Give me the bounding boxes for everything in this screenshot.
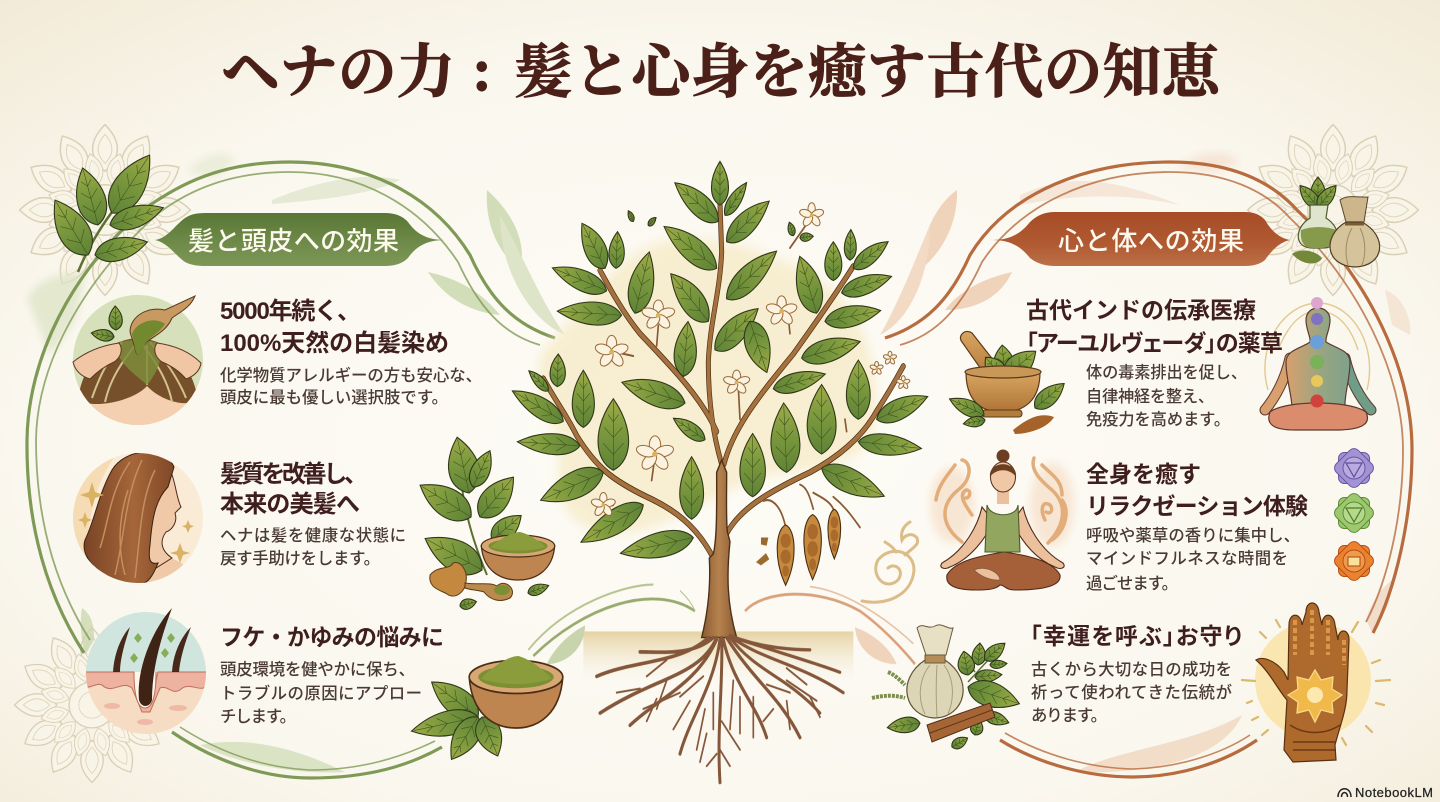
- right item 1 text: 免疫力を高めます。: [1086, 410, 1230, 429]
- title: ヘナの力: [221, 40, 455, 105]
- icon: chakra heart green: [1332, 491, 1376, 535]
- right item 2 text: マインドフルネスな時間を: [1086, 550, 1288, 568]
- right item 1 text: 体の毒素排出を促し、: [1086, 364, 1247, 382]
- flowers: [590, 203, 910, 517]
- right heading pill: [992, 212, 1290, 266]
- right item 3 text: あります。: [1031, 707, 1107, 725]
- right heading pill: 心と体への効果: [1058, 226, 1244, 256]
- right item 1 text: 自律神経を整え、: [1086, 388, 1214, 406]
- left item 3 text: 頭皮環境を健やかに保ち、: [220, 661, 415, 679]
- icon: woman in yoga pose with steam swirls: [930, 450, 1074, 590]
- ornamental swirl: [862, 522, 918, 602]
- left heading pill: [155, 213, 445, 266]
- decorative mandala: top right: [1248, 125, 1418, 295]
- title: 髪と心身を癒す古代の知恵: [514, 40, 1224, 105]
- left heading pill: 髪と頭皮への効果: [188, 226, 399, 256]
- seed pods: [756, 509, 841, 585]
- right item 1 text: 古代インドの伝承医療: [1026, 297, 1256, 323]
- icon: green powder bowl with leaves: [409, 656, 563, 766]
- soft wash behind tree: [538, 239, 877, 534]
- left item 2 text: 髪質を改善し、: [220, 461, 368, 488]
- right item 2 text: 全身を癒す: [1086, 461, 1201, 487]
- left item 1 text: 化学物質アレルギーの方も安心な、: [220, 367, 482, 385]
- right item 3 text: [1030, 623, 1242, 725]
- right item 1 text: [1026, 297, 1283, 429]
- trunk: [702, 460, 737, 638]
- left frame arc: [27, 162, 555, 778]
- left item 1 text: 頭皮に最も優しい選択肢です。: [220, 389, 448, 407]
- decorative mandala: bottom left: [15, 628, 169, 782]
- left item 2 text: 本来の美髪へ: [220, 491, 360, 518]
- roots: [597, 636, 843, 782]
- central henna tree: [509, 161, 931, 782]
- title: [221, 37, 1224, 105]
- left item 3 text: フケ・かゆみの悩みに: [220, 624, 444, 650]
- icon: top-left leaf sprig: [42, 147, 167, 272]
- icon: woman with healthy hair: [73, 453, 203, 583]
- swooshes: [528, 585, 915, 664]
- icon: chakra sacral orange: [1332, 539, 1376, 583]
- icon: mortar and pestle: [946, 331, 1070, 434]
- left item 2 text: [220, 461, 406, 568]
- icon: chakra crown purple: [1332, 446, 1376, 490]
- left item 2 text: 戻す手助けをします。: [220, 550, 380, 568]
- decorative mandala: top left: [20, 125, 190, 295]
- brand mark: NotebookLM: [1355, 785, 1433, 800]
- right item 2 text: リラクゼーション体験: [1086, 493, 1308, 519]
- right item 3 text: 祈って使われてきた伝統が: [1031, 683, 1232, 702]
- left item 2 text: ヘナは髪を健康な状態に: [220, 526, 406, 545]
- icon: jar and poultice bundle: [1292, 177, 1380, 267]
- right item 2 text: [1086, 461, 1308, 593]
- right item 3 text: 古くから大切な日の成功を: [1031, 661, 1232, 679]
- icon: henna applied to hair: [72, 295, 203, 425]
- right item 2 text: 過ごせます。: [1086, 575, 1178, 593]
- icon: henna powder bowl and leaves: [413, 434, 555, 611]
- left item 1 text: 5000年続く、: [220, 298, 361, 325]
- title: :: [472, 37, 492, 103]
- ground: [583, 631, 853, 680]
- icon: scalp and hair follicle: [80, 608, 216, 736]
- left item 3 text: チします。: [220, 708, 296, 726]
- leaves: [509, 161, 931, 566]
- right item 2 text: 呼吸や薬草の香りに集中し、: [1086, 527, 1300, 545]
- icon: herbal bundle with cinnamon: [872, 625, 1023, 751]
- right item 3 text: 「幸運を呼ぶ」お守り: [1030, 623, 1242, 649]
- branches: [543, 203, 903, 558]
- left item 1 text: 100%天然の白髪染め: [220, 330, 449, 357]
- right item 1 text: 「アーユルヴェーダ」の薬草: [1026, 330, 1283, 356]
- left item 3 text: トラブルの原因にアプロー: [220, 684, 422, 703]
- icon: henna hand: [1242, 603, 1390, 762]
- left item 3 text: [220, 624, 444, 726]
- left item 1 text: [220, 298, 482, 407]
- icon: meditating figure with chakras: [1265, 297, 1371, 430]
- watercolour washes: [28, 153, 1410, 773]
- right frame arc: [885, 162, 1412, 777]
